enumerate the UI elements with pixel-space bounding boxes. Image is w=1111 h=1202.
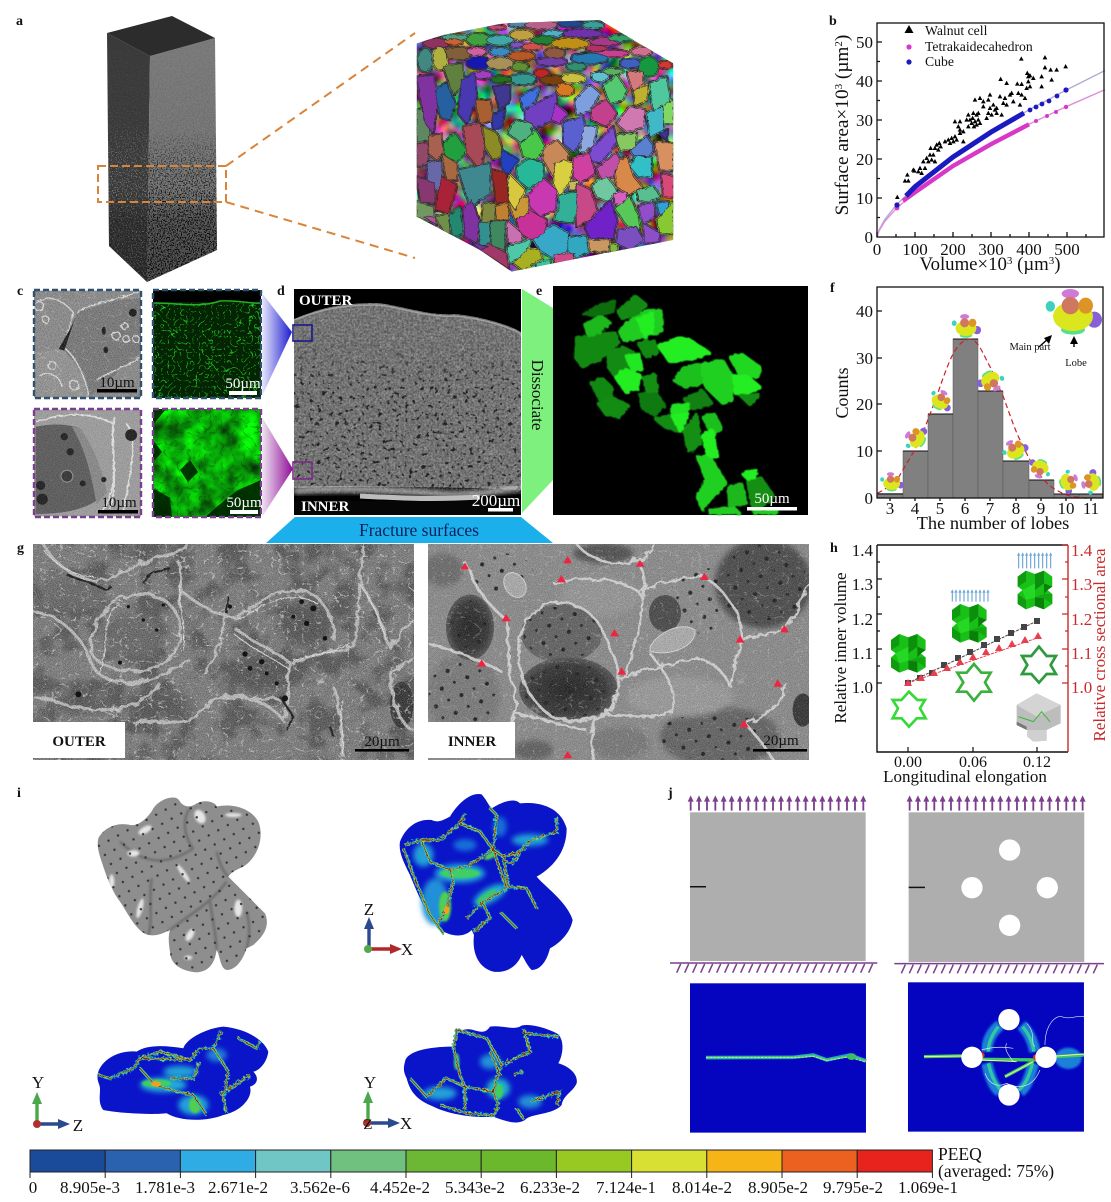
red stress markers (461, 556, 789, 758)
inner fracture surface SEM (428, 544, 809, 760)
tick labels: 7.124e-1 (596, 1178, 656, 1197)
x axis numbers h: 0.06 (959, 754, 987, 771)
PEEQ colour bar legend (29, 1144, 1054, 1197)
axis numbers f: 10 (856, 442, 873, 461)
axis numbers b: 300 (978, 240, 1004, 259)
y axis title b: ) (832, 35, 853, 41)
axes frame and ticks b (877, 23, 1104, 237)
segmented cell cube (413, 20, 677, 273)
panel label b: b (829, 14, 837, 29)
cell shape icons above bars (880, 314, 1103, 496)
solid plate model (670, 795, 877, 973)
axis numbers f: 10 (1058, 499, 1074, 518)
axis numbers b: 50 (856, 33, 873, 52)
star cross-sections (893, 647, 1056, 727)
inner label: INNER (301, 499, 350, 515)
inner SEM micrograph (34, 409, 141, 517)
right axis title h: Relative cross sectional area (1090, 548, 1109, 742)
axis numbers f: 6 (961, 499, 969, 518)
axis numbers f (856, 302, 1099, 518)
scale bar e: 50µm (754, 491, 790, 507)
enlarged cell with main part and lobe callouts: Main part (1009, 342, 1051, 353)
axis triad Y-X: Y (364, 1073, 376, 1092)
outer tag: OUTER (52, 734, 106, 750)
y axis title b: (µm (832, 47, 853, 84)
panel label e: e (536, 284, 542, 299)
panel d: cross-section micrograph (266, 284, 553, 543)
tower: scanned walnut shell block (100, 16, 220, 285)
scale bar e (747, 491, 797, 510)
tick labels: 8.014e-2 (672, 1178, 732, 1197)
axis triad Z-X: Z (364, 900, 374, 919)
grey perforated cell model (98, 797, 267, 972)
PEEQ map ZY view (97, 1027, 268, 1120)
x axis title h: Longitudinal elongation (883, 767, 1047, 786)
outer fracture surface SEM (33, 544, 414, 760)
panel i: finite element cell models (17, 786, 577, 1135)
x axis numbers h (894, 754, 1051, 771)
inner confocal micrograph: 50µm (226, 495, 262, 511)
axis numbers f: 4 (911, 499, 920, 518)
axis numbers f: 8 (1012, 499, 1020, 518)
x axis numbers h: 0.00 (894, 754, 922, 771)
panel label f: f (830, 281, 835, 296)
axis numbers f: 3 (886, 499, 894, 518)
x axis numbers h: 0.12 (1023, 754, 1051, 771)
tick labels: 1.069e-1 (898, 1178, 958, 1197)
panel label j: j (667, 786, 673, 801)
tick marks (30, 1172, 932, 1178)
axis numbers f: 9 (1037, 499, 1045, 518)
PEEQ map top view (400, 794, 573, 972)
left axis numbers h: 1.2 (852, 610, 873, 629)
enlarged cell with main part and lobe callouts: Lobe (1065, 358, 1087, 369)
tick labels: 8.905e-2 (748, 1178, 808, 1197)
tick labels (29, 1178, 958, 1197)
colour segments (30, 1150, 932, 1172)
axis triad Y-Z: Y (32, 1073, 44, 1092)
axis numbers f: 7 (986, 499, 995, 518)
y axis title b: Surface area×10 (832, 89, 853, 215)
y axis title f: Counts (832, 367, 852, 419)
outer SEM micrograph (34, 290, 141, 398)
inner tag: INNER (448, 734, 496, 750)
tick labels: 8.905e-3 (60, 1178, 120, 1197)
left axis numbers h: 1.0 (852, 678, 873, 697)
x axis title b: ) (1054, 254, 1061, 275)
left axis numbers h: 1.1 (852, 644, 873, 663)
panel label h: h (830, 541, 838, 556)
tick labels: 5.343e-2 (445, 1178, 505, 1197)
axis triad Y-Z (32, 1073, 83, 1135)
axis numbers b: 10 (856, 189, 873, 208)
axis numbers b: 0 (873, 240, 881, 259)
legend b (904, 23, 1033, 69)
confocal image of cells (553, 286, 808, 515)
panel label g: g (17, 541, 24, 556)
fit curves (877, 70, 1105, 237)
axis numbers b: 400 (1016, 240, 1042, 259)
blue connector wedge (262, 293, 292, 396)
orange selection box (98, 166, 226, 202)
panel j: crack simulation (667, 786, 1104, 1133)
inner volume squares series (905, 618, 1040, 686)
panel e: dissociated fluorescent cells (536, 284, 808, 515)
panel label c: c (17, 284, 23, 299)
right axis numbers h: 1.4 (1071, 541, 1093, 560)
legend b: Tetrakaidecahedron (925, 39, 1033, 54)
PEEQ map XY view (404, 1025, 577, 1122)
grey 3D unit cell icon (1017, 693, 1061, 742)
axes frame and ticks f (877, 287, 1103, 501)
axis numbers f: 20 (856, 395, 873, 414)
blue inset box (293, 325, 312, 341)
inner confocal micrograph (153, 409, 262, 517)
outer label: OUTER (299, 293, 353, 309)
scale bar g outer: 20µm (364, 734, 400, 750)
tick labels: 3.562e-6 (290, 1178, 350, 1197)
axis numbers b: 40 (856, 72, 873, 91)
outer tag (33, 722, 125, 758)
axis triad Y-X (363, 1073, 412, 1133)
legend title (938, 1144, 1054, 1181)
left axis title h: Relative inner volume (831, 572, 850, 724)
panel label i: i (17, 786, 21, 801)
axis numbers f: 5 (936, 499, 944, 518)
x axis title b: 3 (1007, 255, 1013, 267)
axis numbers b: 100 (902, 240, 928, 259)
panel f: lobe count histogram (830, 281, 1103, 533)
blue load arrows (951, 552, 1052, 602)
gaussian fit dashed curve (877, 339, 1087, 498)
legend b: Walnut cell (925, 23, 988, 38)
axes frame h (877, 545, 1068, 752)
inner SEM micrograph: 10µm (101, 495, 137, 511)
scale bar g outer (355, 734, 409, 752)
axis numbers b (856, 33, 1080, 259)
inner tag (428, 722, 515, 758)
purple inset box (293, 462, 312, 479)
panel h: elongation chart (830, 541, 1109, 786)
axis numbers b: 30 (856, 111, 873, 130)
axis numbers b: 20 (856, 150, 873, 169)
outer SEM micrograph: 10µm (99, 375, 135, 391)
walnut cell points (895, 55, 1068, 199)
x axis title b: Volume×10 (919, 254, 1007, 275)
legend title: PEEQ (938, 1144, 982, 1164)
panel c: SEM and confocal micrographs (17, 284, 293, 517)
x axis title b: 3 (1049, 255, 1055, 267)
tick labels: 4.452e-2 (370, 1178, 430, 1197)
y axis title b: 2 (833, 41, 845, 47)
right axis numbers h (1071, 541, 1093, 697)
panel label d: d (277, 284, 285, 299)
axis numbers f: 30 (856, 349, 873, 368)
axis numbers f: 40 (856, 302, 873, 321)
axis numbers f: 11 (1083, 499, 1099, 518)
dissociate wedge (522, 289, 553, 513)
axis numbers b: 0 (864, 228, 873, 247)
scale bar g inner: 20µm (763, 733, 799, 749)
tick labels: 1.781e-3 (135, 1178, 195, 1197)
left axis numbers h: 1.4 (852, 541, 874, 560)
cube points (894, 87, 1069, 208)
dissociated cells cluster (575, 296, 778, 513)
axis triad Y-X: Z (363, 1117, 373, 1133)
panel label a: a (16, 14, 23, 29)
panel g: fracture surfaces SEM (17, 538, 813, 767)
orange dashed zoom lines (226, 33, 415, 258)
scale bar g inner (753, 733, 807, 752)
tick labels: 0 (29, 1178, 37, 1197)
left axis numbers h (852, 541, 874, 697)
fracture surfaces wedge (266, 517, 553, 543)
y axis title b: 3 (833, 83, 845, 89)
purple connector wedge (262, 417, 293, 517)
enlarged cell with main part and lobe callouts (1009, 289, 1102, 369)
bar top outlines (878, 339, 1103, 494)
tick labels: 6.233e-2 (520, 1178, 580, 1197)
green geometry icons (891, 571, 1052, 673)
tick labels: 2.671e-2 (208, 1178, 268, 1197)
perforated plate model (894, 795, 1104, 973)
axis triad Z-X: X (401, 940, 413, 959)
right axis numbers h: 1.0 (1071, 678, 1092, 697)
outer confocal micrograph (153, 290, 261, 398)
solid plate crack result (690, 983, 866, 1133)
x axis title b: (µm (1012, 254, 1049, 275)
axis numbers f: 0 (864, 489, 873, 508)
axis triad Y-Z: Z (73, 1116, 83, 1135)
scale bar d: 200µm (472, 491, 520, 510)
histogram bars (877, 339, 1103, 498)
right axis numbers h: 1.1 (1071, 644, 1092, 663)
cross sectional area triangles series (904, 632, 1042, 686)
panel b: surface area vs volume scatter (829, 14, 1105, 275)
right axis numbers h: 1.2 (1071, 610, 1092, 629)
x axis title f: The number of lobes (917, 513, 1069, 533)
panel a: micro-CT tower and segmented cube (16, 14, 677, 285)
axis numbers b: 200 (940, 240, 966, 259)
right axis numbers h: 1.3 (1071, 575, 1092, 594)
perforated plate crack result (908, 982, 1084, 1132)
cross-section image (294, 289, 521, 515)
outer confocal micrograph: 50µm (225, 376, 261, 392)
left axis numbers h: 1.3 (852, 575, 873, 594)
axis numbers b: 500 (1054, 240, 1080, 259)
tick labels: 9.795e-2 (823, 1178, 883, 1197)
tetrakaidecahedron points (895, 105, 1068, 210)
axis triad Y-X: X (400, 1114, 412, 1133)
fracture surfaces wedge: Fracture surfaces (359, 520, 479, 540)
axis triad Z-X (364, 900, 413, 959)
dissociate wedge: Dissociate (528, 360, 547, 430)
legend title: (averaged: 75%) (938, 1161, 1054, 1181)
legend b: Cube (925, 54, 954, 69)
